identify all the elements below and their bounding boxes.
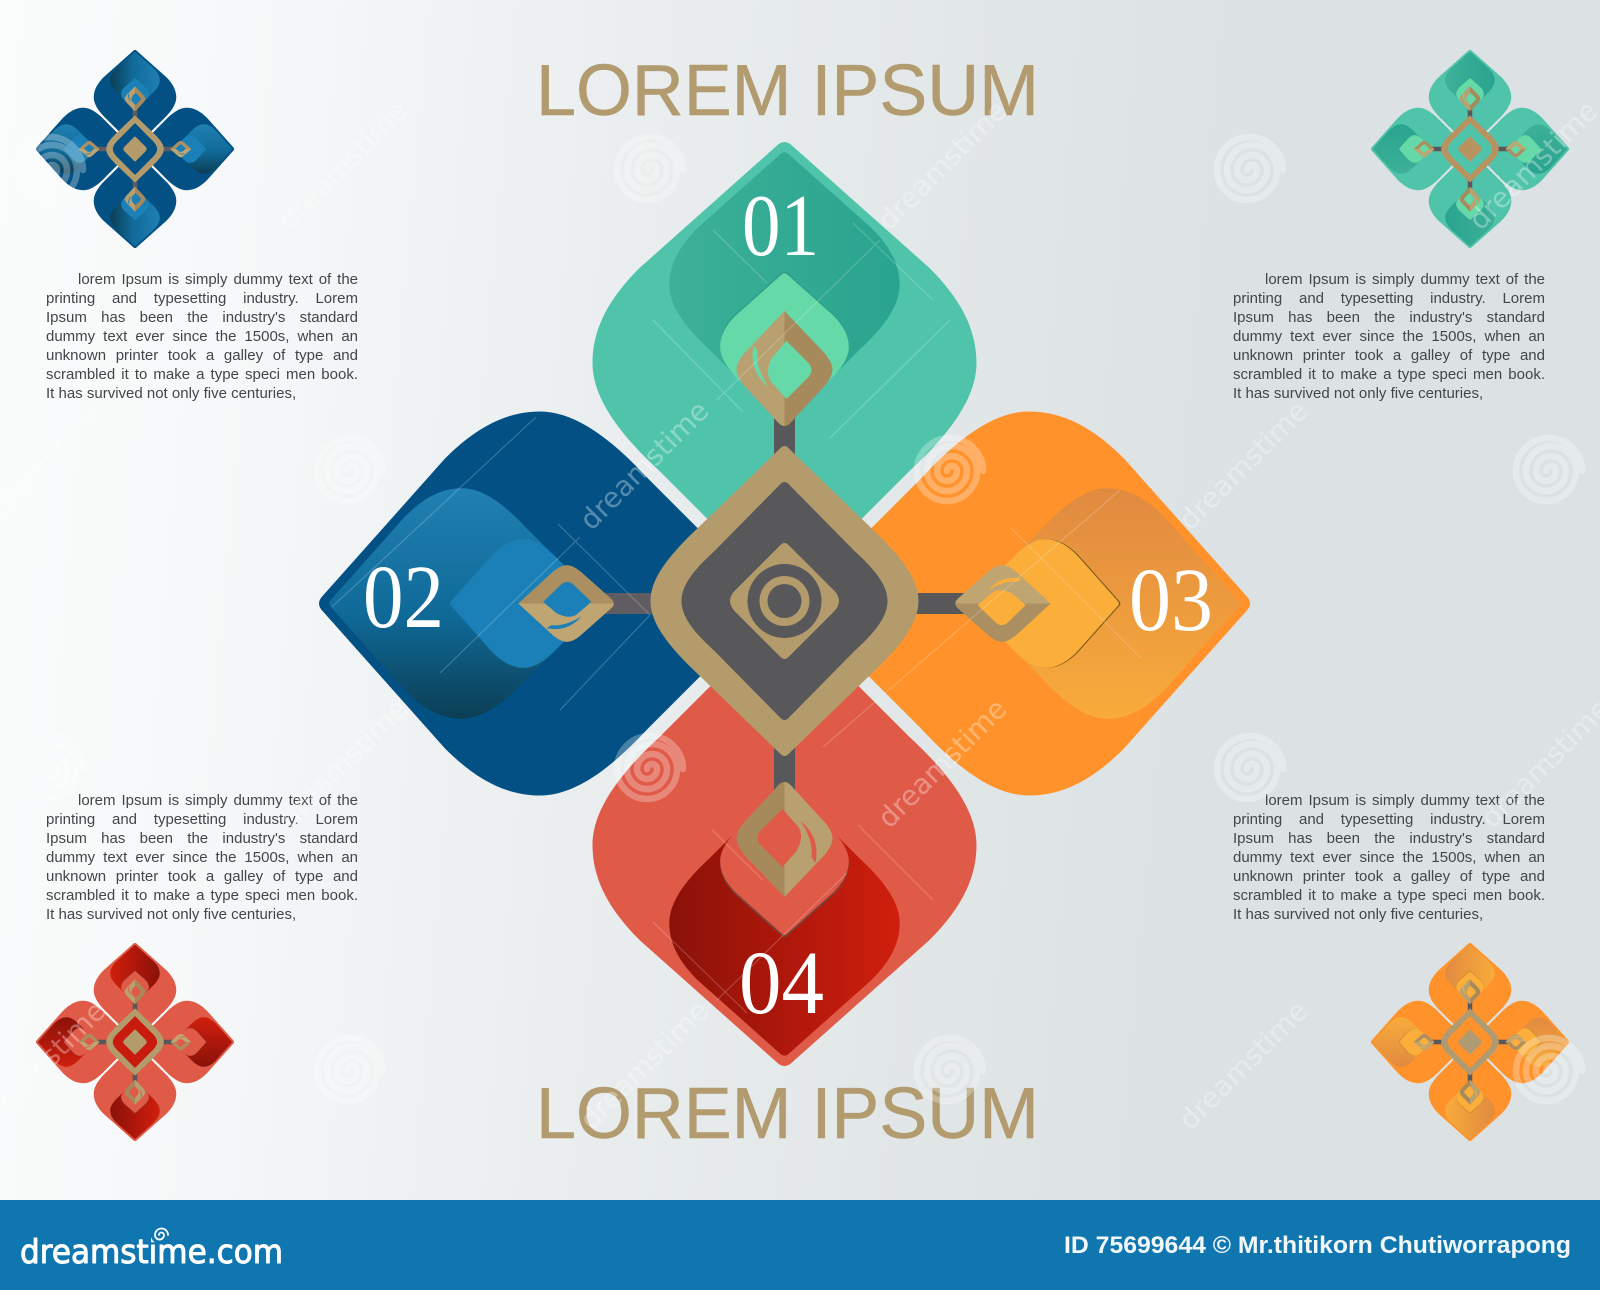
watermark overlay: dreamstime bbox=[871, 94, 1013, 236]
text block: bottom right: unknown printer took a galley of type and bbox=[1233, 868, 1545, 885]
icon: small blue flower bbox=[36, 50, 234, 248]
text block: bottom left: unknown printer took a galley of type and bbox=[46, 868, 358, 885]
text block: bottom left: Ipsum has been the industry's standard bbox=[46, 830, 358, 847]
text block: top left: lorem Ipsum is simply dummy text of the bbox=[78, 271, 358, 288]
text block: bottom right: Ipsum has been the industry's standard bbox=[1233, 830, 1545, 847]
number 04: 04 bbox=[739, 934, 824, 1033]
text block: bottom right bbox=[1233, 792, 1545, 923]
watermark overlay: dreamstime bbox=[871, 692, 1013, 834]
petal 03: orange bbox=[796, 412, 1250, 796]
petal 02: blue bbox=[319, 412, 773, 796]
number 03: 03 bbox=[1129, 551, 1213, 650]
text block: bottom right: scrambled it to make a type speci men book. bbox=[1233, 887, 1545, 904]
text block: top left bbox=[46, 271, 358, 402]
text block: bottom right: printing and typesetting industry. Lorem bbox=[1233, 811, 1545, 828]
text block: bottom left: lorem Ipsum is simply dummy text of the bbox=[78, 792, 358, 809]
text block: bottom left: scrambled it to make a type speci men book. bbox=[46, 887, 358, 904]
text block: top right bbox=[1233, 271, 1545, 402]
text block: bottom right: It has survived not only five centuries, bbox=[1233, 906, 1483, 923]
main flower diagram bbox=[319, 142, 1250, 1066]
title: bottom heading: LOREM IPSUM bbox=[536, 1074, 1039, 1154]
text block: bottom right: lorem Ipsum is simply dummy text of the bbox=[1265, 792, 1545, 809]
watermark overlay: dreamstime bbox=[573, 994, 715, 1136]
text block: top right: lorem Ipsum is simply dummy text of the bbox=[1265, 271, 1545, 288]
watermark overlay: dreamstime bbox=[1172, 994, 1314, 1136]
text block: top left: It has survived not only five centuries, bbox=[46, 385, 296, 402]
icon: small orange flower bbox=[1371, 943, 1569, 1141]
text block: top right: dummy text ever since the 1500s, when an bbox=[1233, 328, 1545, 345]
watermark overlay: dreamstime bbox=[272, 692, 414, 834]
text block: top right: Ipsum has been the industry's standard bbox=[1233, 309, 1545, 326]
text block: bottom left: It has survived not only five centuries, bbox=[46, 906, 296, 923]
number 01: 01 bbox=[742, 178, 819, 275]
text block: top left: dummy text ever since the 1500s, when an bbox=[46, 328, 358, 345]
watermark overlay: dreamstime bbox=[272, 94, 414, 236]
icon: small teal flower bbox=[1371, 50, 1569, 248]
text block: top left: scrambled it to make a type speci men book. bbox=[46, 366, 358, 383]
watermark overlay: dreamstime bbox=[573, 394, 715, 536]
text block: top right: printing and typesetting industry. Lorem bbox=[1233, 290, 1545, 307]
watermark overlay: dreamstime bbox=[1172, 394, 1314, 536]
petal 04: red bbox=[592, 612, 976, 1066]
text block: bottom left: printing and typesetting industry. Lorem bbox=[46, 811, 358, 828]
footer logo spiral bbox=[151, 1226, 169, 1244]
text block: bottom left bbox=[46, 792, 358, 923]
centre emblem bbox=[650, 446, 918, 756]
text block: bottom right: dummy text ever since the 1500s, when an bbox=[1233, 849, 1545, 866]
petal 01: teal bbox=[592, 142, 976, 596]
text block: top left: Ipsum has been the industry's standard bbox=[46, 309, 358, 326]
text block: bottom left: dummy text ever since the 1500s, when an bbox=[46, 849, 358, 866]
text block: top right: It has survived not only five centuries, bbox=[1233, 385, 1483, 402]
text block: top right: scrambled it to make a type speci men book. bbox=[1233, 366, 1545, 383]
text block: top left: unknown printer took a galley of type and bbox=[46, 347, 358, 364]
text block: top right: unknown printer took a galley of type and bbox=[1233, 347, 1545, 364]
footer credit: ID 75699644 © Mr.thitikorn Chutiworrapong bbox=[1064, 1232, 1571, 1259]
title: top heading: LOREM IPSUM bbox=[536, 51, 1039, 131]
number 02: 02 bbox=[363, 548, 444, 647]
icon: small red flower bbox=[36, 943, 234, 1141]
footer bar bbox=[0, 1200, 1600, 1290]
text block: top left: printing and typesetting industry. Lorem bbox=[46, 290, 358, 307]
footer logo text: dreamstime.com bbox=[20, 1232, 283, 1271]
